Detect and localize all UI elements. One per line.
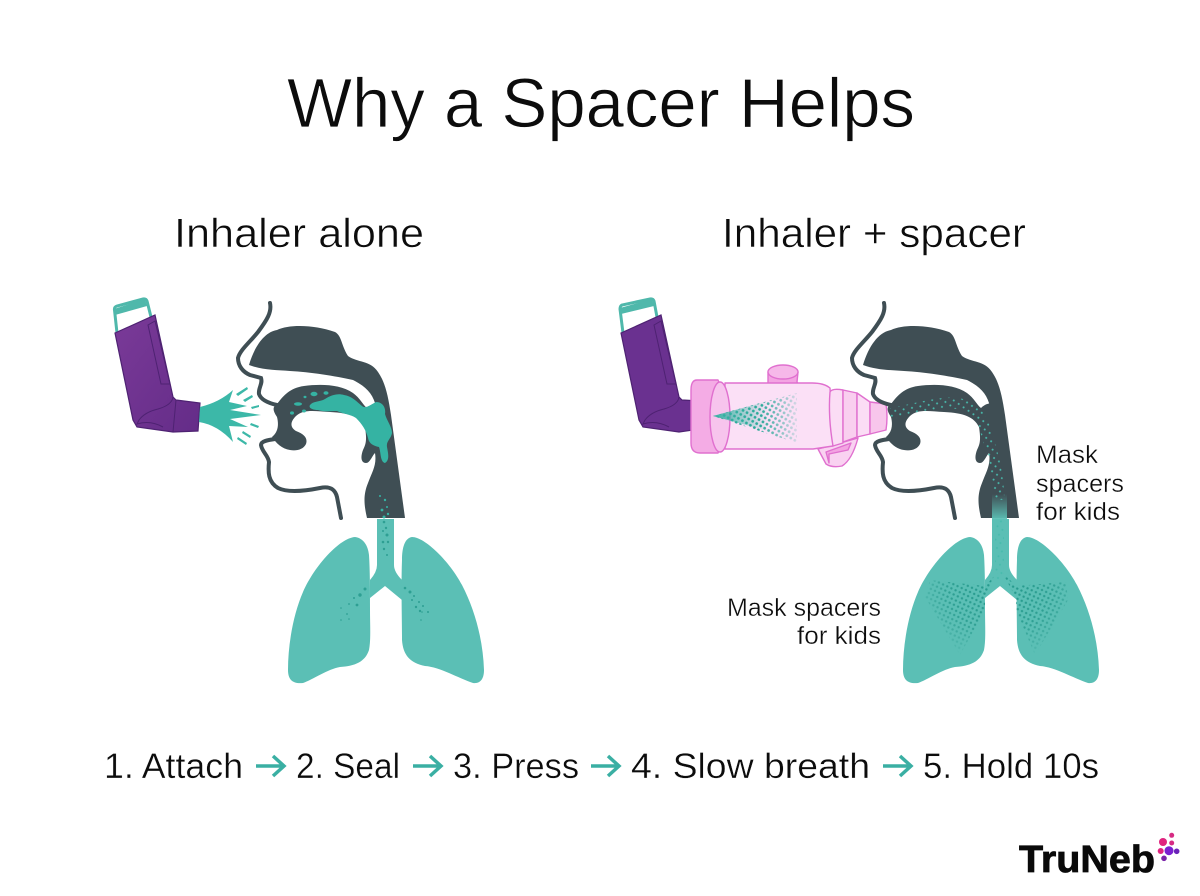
lungs [288,519,484,683]
lungs [903,494,1099,683]
panel: inhaler + spacer diagram [620,299,1099,683]
icon: spray burst [199,387,261,445]
heading: inhaler alone: Inhaler alone [174,210,424,256]
arrow [591,756,619,776]
lung particle deposition [925,520,1068,655]
head cross-section [238,303,405,518]
step 4: 4. Slow breath [631,747,870,786]
callout: mask spacers right: for kids [1036,498,1120,526]
spacer valve button [764,372,799,389]
spacer chamber [691,365,887,467]
step 1: 1. Attach [104,747,243,786]
title: Why a Spacer Helps [287,64,915,142]
head cross-section [852,303,1019,518]
callout: mask spacers left: for kids [797,622,881,650]
icon: inhaler [620,299,700,432]
aerosol path through airway [889,403,999,500]
spacer tube [725,383,833,449]
spacer end ring [691,380,726,453]
step 2: 2. Seal [296,747,400,786]
spacer mouthpiece [829,389,843,446]
step 5: 5. Hold 10s [923,747,1099,786]
arrow [256,756,284,776]
icon: inhaler [114,299,200,432]
scattered lung particles [340,521,429,621]
step 3: 3. Press [453,747,579,786]
arrow [883,756,911,776]
medication deposit in throat [290,391,392,518]
steps row [104,747,1099,786]
spacer bottom handle [818,438,858,467]
aerosol cloud in spacer [713,393,797,443]
callout: mask spacers left: Mask spacers [727,594,881,622]
logo: TruNeb: TruNeb [1019,839,1155,881]
callout: mask spacers right: spacers [1036,470,1124,498]
arrow [413,756,441,776]
heading: inhaler + spacer: Inhaler + spacer [722,210,1026,256]
panel: inhaler alone diagram [114,299,484,683]
callout: mask spacers right: Mask [1036,441,1099,469]
